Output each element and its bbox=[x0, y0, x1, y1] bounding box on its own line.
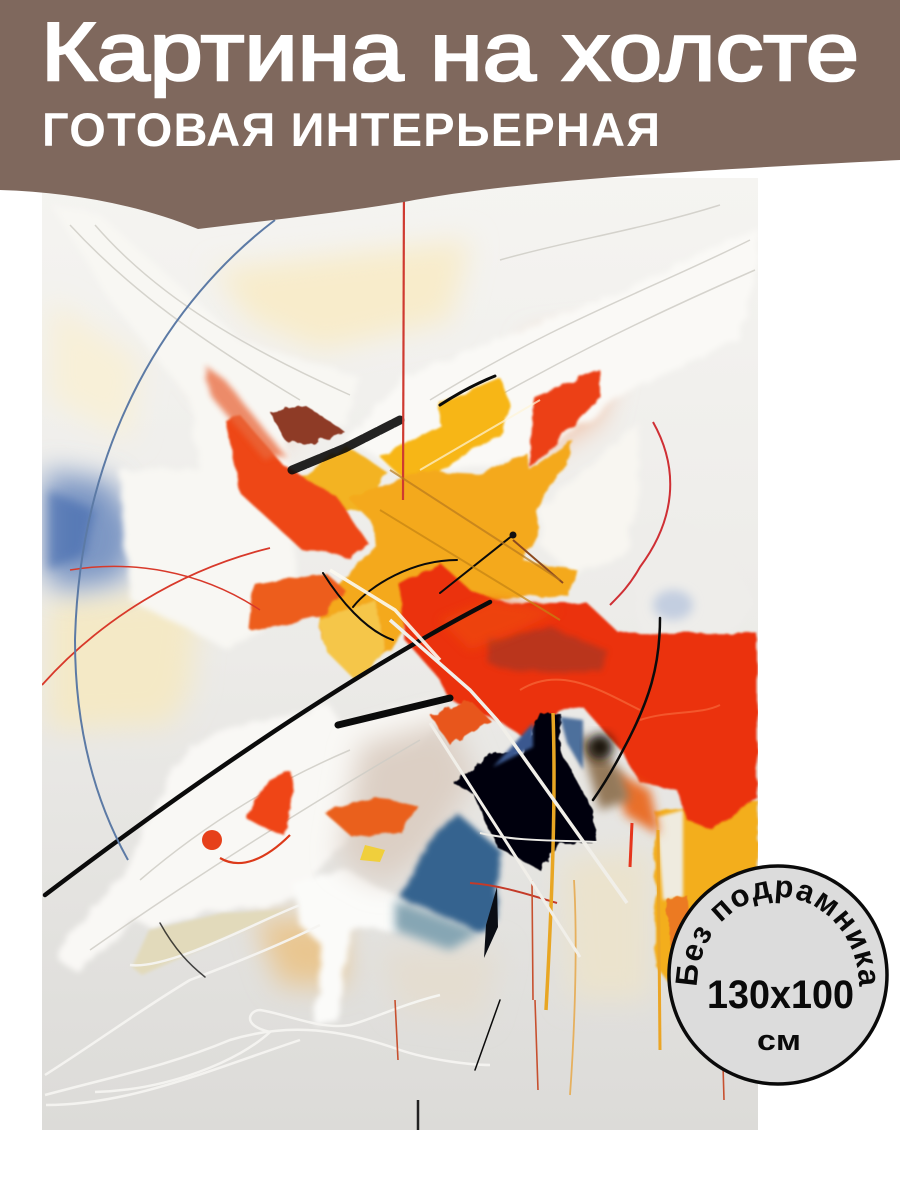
orange smears bbox=[440, 600, 560, 650]
header banner bbox=[0, 0, 900, 229]
title: Картина на холсте bbox=[41, 5, 859, 98]
subtitle: ГОТОВАЯ ИНТЕРЬЕРНАЯ bbox=[42, 103, 660, 156]
thin coloured lines bbox=[42, 178, 724, 1130]
size badge bbox=[667, 864, 889, 1086]
cream washes bbox=[48, 240, 650, 1020]
unit: см bbox=[757, 1025, 801, 1057]
yellow field bbox=[300, 378, 758, 1000]
brush ridges bbox=[70, 205, 755, 950]
dark navy and blue paint bbox=[395, 900, 480, 950]
abstract painting bbox=[42, 178, 758, 1130]
blue wash left bbox=[45, 470, 140, 590]
paint streaks bbox=[380, 400, 720, 720]
white trailing strokes, lower left bbox=[45, 905, 490, 1105]
white impasto bbox=[58, 298, 742, 1024]
size value: 130x100 bbox=[707, 973, 854, 1017]
red-orange paint bbox=[225, 370, 757, 837]
scumbled grey zone bbox=[340, 720, 475, 885]
black strokes bbox=[45, 376, 660, 1070]
curved label: Без подрамника bbox=[675, 880, 876, 987]
